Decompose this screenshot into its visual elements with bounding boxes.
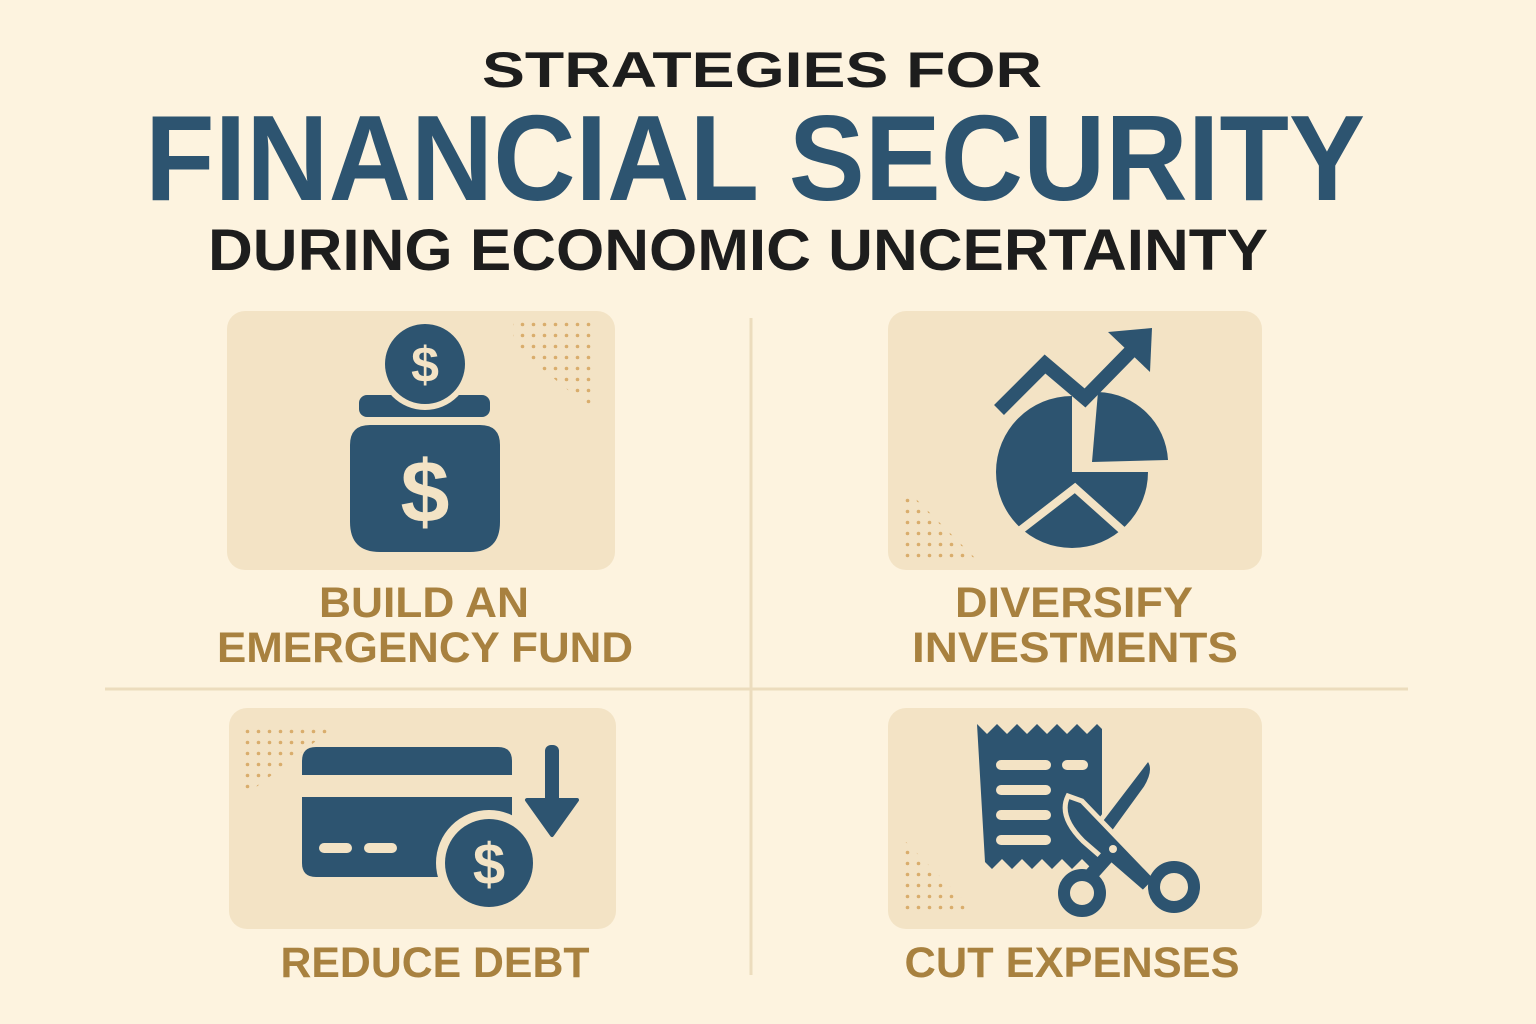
icon: credit card, coin, down arrow: $ [473, 832, 505, 897]
title: STRATEGIES FOR [482, 42, 1042, 98]
label: reduce debt: REDUCE DEBT [280, 939, 590, 987]
icon: jar with coin: $ [411, 337, 439, 393]
icon: trend arrow and pie chart [996, 328, 1168, 548]
panel: cut expenses [888, 708, 1262, 987]
label: cut expenses: CUT EXPENSES [904, 939, 1240, 987]
label: diversify investments: DIVERSIFY [955, 579, 1193, 627]
icon: jar with coin [350, 318, 500, 552]
label: build an emergency fund [217, 579, 633, 672]
icon: receipt and scissors [977, 724, 1194, 911]
label: build an emergency fund: EMERGENCY FUND [217, 624, 633, 672]
panel: reduce debt [229, 708, 616, 987]
panel: emergency fund [217, 311, 633, 672]
label: diversify investments [912, 579, 1238, 672]
label: diversify investments: INVESTMENTS [912, 624, 1238, 672]
label: build an emergency fund: BUILD AN [319, 579, 529, 627]
icon: credit card, coin, down arrow [302, 745, 577, 916]
title: DURING ECONOMIC UNCERTAINTY [208, 218, 1268, 283]
panel: diversify investments [888, 311, 1262, 672]
title [145, 42, 1365, 283]
icon: jar with coin: $ [401, 442, 449, 541]
title: FINANCIAL SECURITY [145, 90, 1365, 226]
